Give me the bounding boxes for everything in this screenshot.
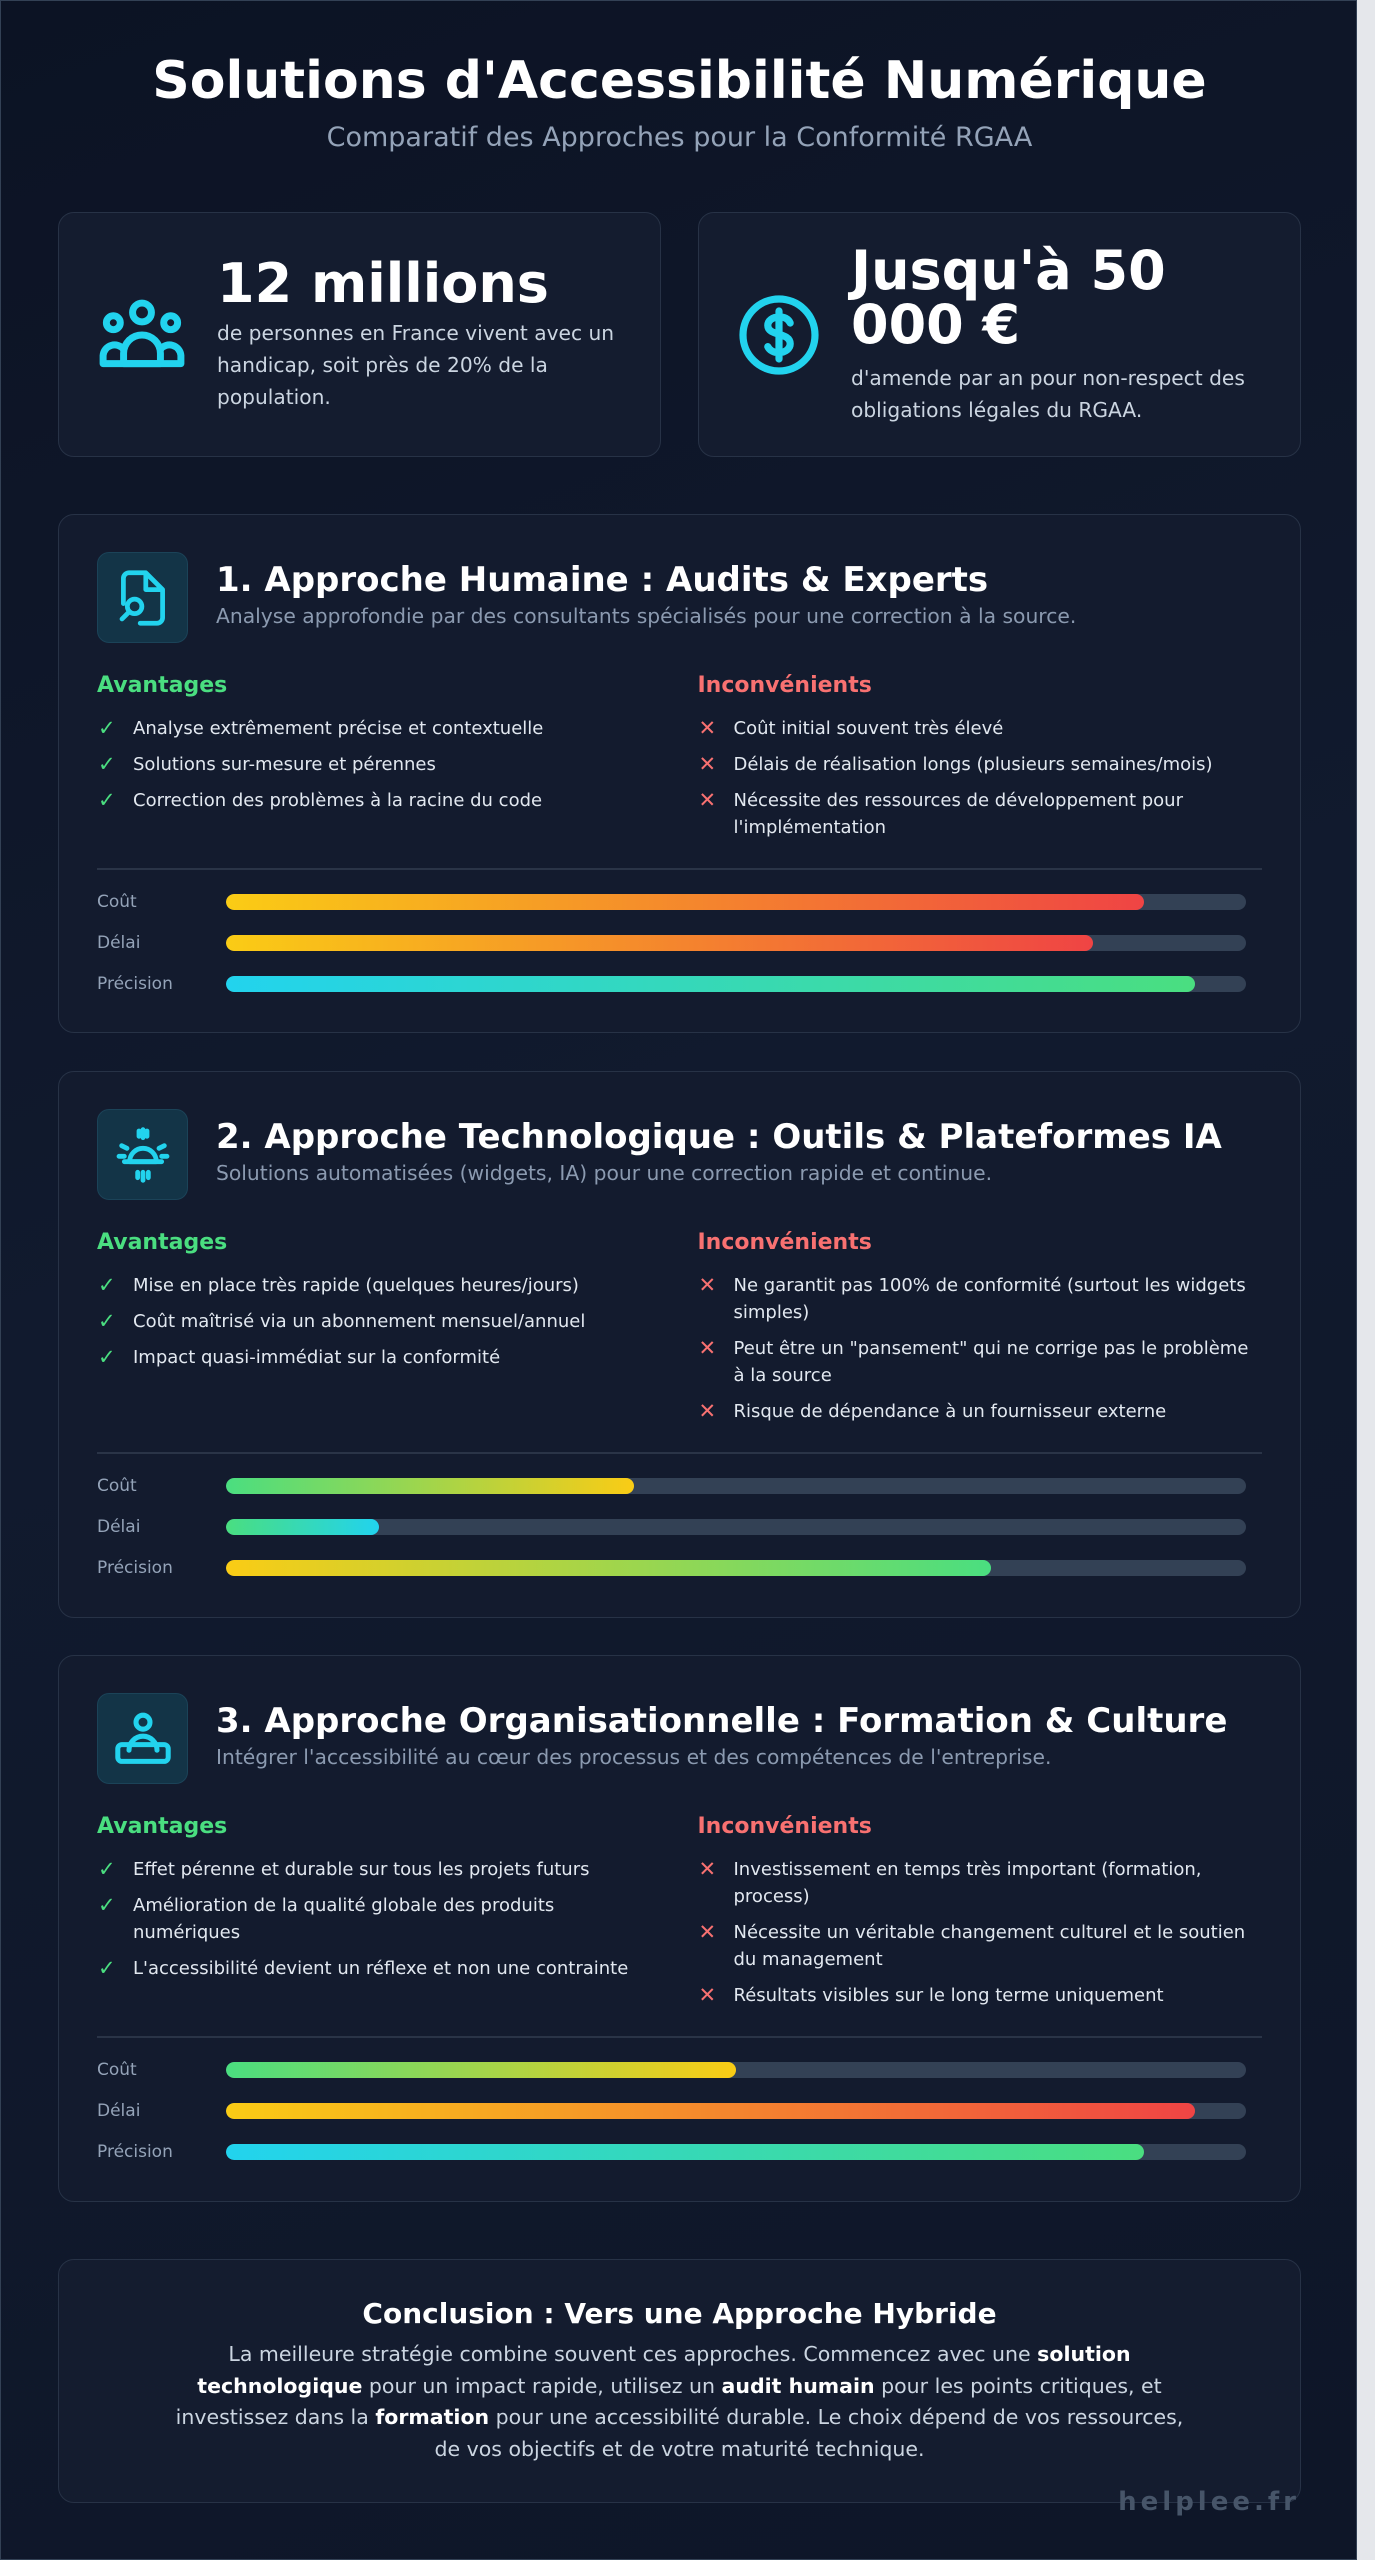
pros and cons: [97, 1230, 1248, 1423]
panel header: Solutions automatisées (widgets, IA) pour une correction rapide et continue.: [216, 1161, 992, 1185]
stat card: amende: [698, 212, 1301, 457]
bar chart: humaine: Délai: [97, 933, 140, 953]
bar chart: technologique: [97, 1476, 1246, 1578]
bar chart: organisationnelle: Délai: [97, 2101, 140, 2121]
panel header: [97, 1109, 1222, 1200]
pros and cons: ✓: [98, 752, 116, 776]
pros and cons: ✕: [698, 1399, 716, 1423]
pros and cons: Avantages: [97, 673, 227, 698]
pros and cons: Coût maîtrisé via un abonnement mensuel/annuel: [133, 1311, 585, 1332]
pros and cons: ✓: [98, 788, 116, 812]
panel: approche technologique: [58, 1071, 1301, 1618]
conclusion: [58, 2259, 1301, 2503]
icon: person training: [97, 1693, 188, 1784]
title: Solutions d'Accessibilité Numérique: [152, 51, 1207, 111]
bar chart: technologique: Délai: [97, 1517, 140, 1537]
pros and cons: Inconvénients: [698, 1230, 872, 1255]
subtitle: Comparatif des Approches pour la Conformité RGAA: [327, 122, 1032, 153]
pros and cons: Avantages: [97, 1814, 227, 1839]
pros and cons: Investissement en temps très important (formation, process): [734, 1859, 1202, 1907]
panel header: [97, 552, 1076, 643]
bar chart: organisationnelle: [97, 2060, 1246, 2162]
icon: file search: [97, 552, 188, 643]
pros and cons: Délais de réalisation longs (plusieurs semaines/mois): [734, 754, 1213, 775]
pros and cons: Analyse extrêmement précise et contextuelle: [133, 718, 543, 739]
pros and cons: ✕: [698, 1336, 716, 1360]
stat text: Jusqu'à 50 000 €: [851, 238, 1166, 356]
stat text: d'amende par an pour non-respect des obligations légales du RGAA.: [851, 366, 1245, 422]
pros and cons: ✕: [698, 716, 716, 740]
stat text: de personnes en France vivent avec un handicap, soit près de 20% de la population.: [217, 320, 614, 408]
pros and cons: Coût initial souvent très élevé: [734, 718, 1003, 739]
icon: people group: [100, 300, 184, 368]
bar chart: organisationnelle: Coût: [97, 2060, 137, 2080]
panel: approche humaine: [58, 514, 1301, 1033]
stat text: [217, 252, 614, 408]
pros and cons: ✓: [98, 1857, 116, 1881]
stat card: 12 millions: [58, 212, 661, 457]
panel header: Intégrer l'accessibilité au cœur des processus et des compétences de l'entreprise.: [216, 1745, 1051, 1769]
panel: approche organisationnelle: [58, 1655, 1301, 2202]
pros and cons: [97, 673, 1213, 838]
pros and cons: ✕: [698, 1983, 716, 2007]
pros and cons: Avantages: [97, 1230, 227, 1255]
pros and cons: Ne garantit pas 100% de conformité (surtout les widgets simples): [734, 1275, 1246, 1323]
pros and cons: Amélioration de la qualité globale des produits numériques: [133, 1895, 554, 1943]
pros and cons: ✕: [698, 1273, 716, 1297]
pros and cons: Impact quasi-immédiat sur la conformité: [133, 1347, 500, 1368]
brand: helplee.fr: [1118, 2487, 1300, 2517]
pros and cons: ✓: [98, 1273, 116, 1297]
conclusion: Conclusion : Vers une Approche Hybride: [362, 2297, 997, 2330]
bar chart: technologique: Précision: [97, 1558, 173, 1578]
pros and cons: ✓: [98, 1893, 116, 1917]
pros and cons: [97, 1814, 1245, 2007]
bar chart: humaine: Coût: [97, 892, 137, 912]
stat text: [848, 238, 1245, 422]
stat text: 12 millions: [217, 252, 549, 314]
pros and cons: Inconvénients: [698, 673, 872, 698]
panel header: 2. Approche Technologique : Outils & Plateformes IA: [216, 1117, 1222, 1157]
bar chart: humaine: [97, 892, 1246, 994]
panel header: 1. Approche Humaine : Audits & Experts: [216, 560, 988, 600]
conclusion: La meilleure stratégie combine souvent ces approches. Commencez avec une solution technologique pour un impact rapide, utilisez un audit humain pour les points critiques, et investissez dans la formation pour une accessibilité durable. Le choix dépend de vos ressources, de vos objectifs et de votre maturité technique.: [176, 2342, 1183, 2460]
pros and cons: ✕: [698, 752, 716, 776]
pros and cons: Risque de dépendance à un fournisseur externe: [734, 1401, 1166, 1422]
pros and cons: Nécessite des ressources de développement pour l'implémentation: [734, 790, 1183, 838]
bar chart: technologique: Coût: [97, 1476, 137, 1496]
pros and cons: Effet pérenne et durable sur tous les projets futurs: [133, 1859, 590, 1880]
pros and cons: ✓: [98, 1345, 116, 1369]
panel header: [97, 1693, 1227, 1784]
icon: dollar coin: [739, 295, 819, 375]
pros and cons: Mise en place très rapide (quelques heures/jours): [133, 1275, 579, 1296]
bar chart: organisationnelle: Précision: [97, 2142, 173, 2162]
bar chart: humaine: Précision: [97, 974, 173, 994]
panel header: Analyse approfondie par des consultants spécialisés pour une correction à la source.: [216, 604, 1076, 628]
pros and cons: Peut être un "pansement" qui ne corrige pas le problème à la source: [734, 1338, 1248, 1386]
pros and cons: ✕: [698, 1920, 716, 1944]
icon: tech lamp: [97, 1109, 188, 1200]
pros and cons: L'accessibilité devient un réflexe et non une contrainte: [133, 1958, 628, 1979]
pros and cons: Nécessite un véritable changement culturel et le soutien du management: [734, 1922, 1245, 1970]
pros and cons: Inconvénients: [698, 1814, 872, 1839]
pros and cons: ✓: [98, 716, 116, 740]
pros and cons: Correction des problèmes à la racine du code: [133, 790, 542, 811]
pros and cons: Solutions sur-mesure et pérennes: [133, 754, 436, 775]
pros and cons: ✕: [698, 1857, 716, 1881]
pros and cons: ✓: [98, 1309, 116, 1333]
pros and cons: Résultats visibles sur le long terme uniquement: [734, 1985, 1164, 2006]
panel header: 3. Approche Organisationnelle : Formation & Culture: [216, 1701, 1227, 1741]
pros and cons: ✕: [698, 788, 716, 812]
pros and cons: ✓: [98, 1956, 116, 1980]
